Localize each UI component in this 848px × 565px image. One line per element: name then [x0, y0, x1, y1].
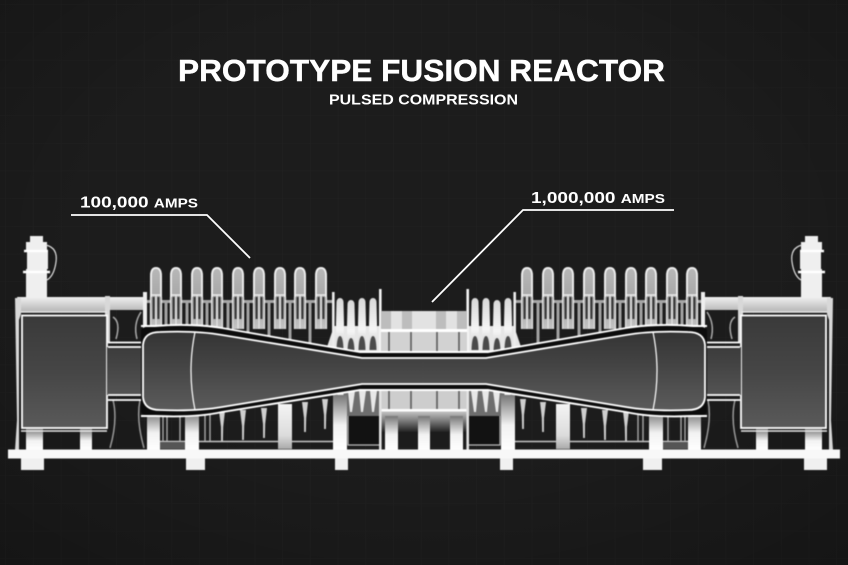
label: 1,000,000 amps: 1,000,000 AMPS — [531, 190, 665, 207]
center support leg — [418, 416, 430, 450]
right half of reactor — [423, 236, 833, 470]
callout line: 1,000,000 amps — [432, 210, 674, 302]
label: 100,000 amps: 100,000 AMPS — [80, 194, 198, 212]
base rail — [8, 450, 840, 458]
subtitle: PULSED COMPRESSION — [329, 92, 518, 108]
title: PROTOTYPE FUSION REACTOR — [178, 54, 665, 88]
left half of reactor — [15, 236, 425, 470]
reactor cross-section — [8, 236, 840, 470]
callout line: 100,000 amps — [71, 215, 250, 258]
